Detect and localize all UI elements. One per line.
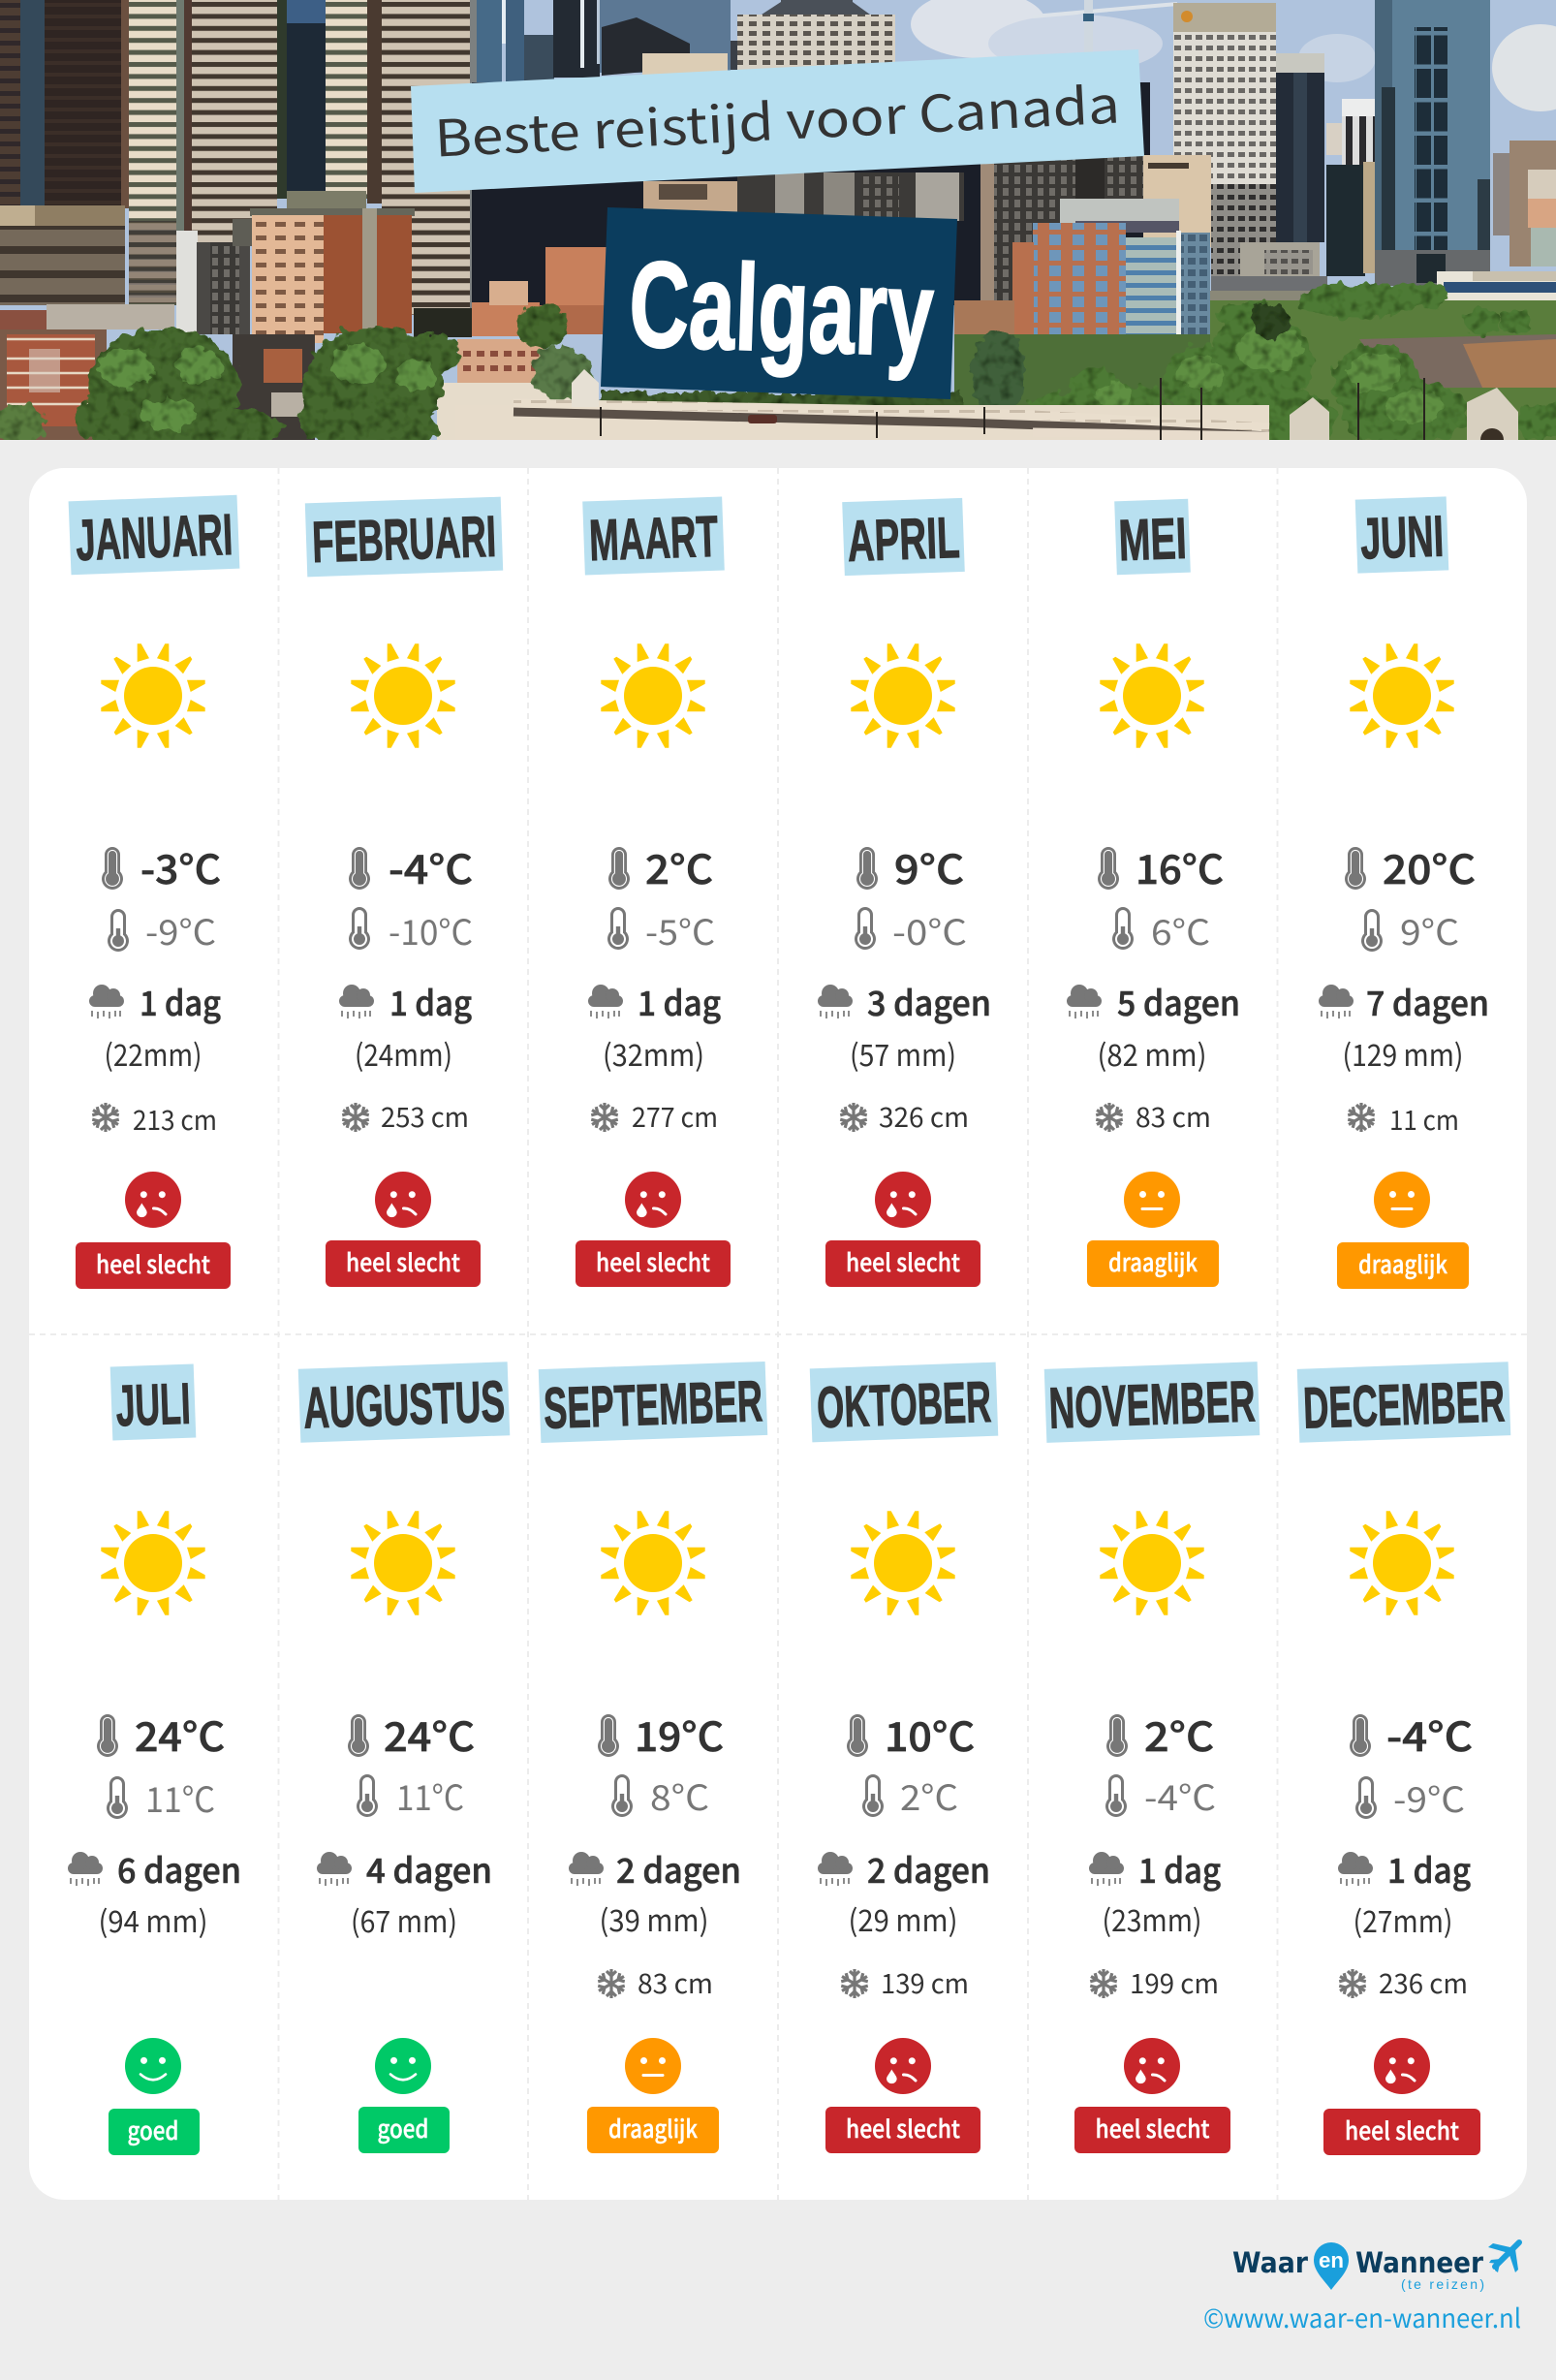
month heading: NOVEMBER [1047,1368,1257,1441]
rating badge: goed [378,2111,428,2145]
high temperature [598,1705,724,1763]
month heading: JUNI [1359,504,1445,571]
rating icon [625,1172,681,1228]
rating icon [875,2038,931,2094]
high temperature: 19°C [635,1705,724,1763]
month heading [69,495,239,575]
panel: november [1044,1362,1260,2153]
city box: Calgary: Calgary [627,235,936,382]
rain days: 4 dagen [366,1844,492,1894]
high temperature [1345,837,1476,895]
icon: sun [851,643,955,748]
snow [840,1963,969,2002]
low temperature [107,1772,215,1823]
high temperature: 2°C [645,837,713,895]
snow [590,1097,718,1136]
month heading: JANUARI [75,502,233,573]
snow: 326 cm [879,1097,969,1136]
rating badge: heel slecht [96,1246,210,1281]
icon: sun [351,643,455,748]
low temperature: -9°C [145,905,216,955]
high temperature: -3°C [140,837,221,895]
month heading [539,1362,767,1443]
rating icon [1374,2038,1430,2094]
rain days: 5 dagen [1117,977,1240,1026]
month heading: OKTOBER [816,1369,992,1440]
month heading: MEI [1117,506,1188,573]
low temperature: -10°C [389,905,473,955]
month heading: FEBRUARI [311,504,497,575]
rain days [588,977,721,1026]
high temperature: 24°C [135,1705,225,1763]
rainfall: (39 mm) [599,1896,709,1940]
snow [839,1097,969,1136]
rating badge [825,2107,980,2153]
month heading [110,1364,196,1440]
rainfall: (94 mm) [99,1897,207,1941]
rating badge: heel slecht [846,1244,960,1279]
icon: sun [1350,1511,1454,1615]
snow: 83 cm [1136,1097,1211,1136]
bridge [582,405,1269,440]
month heading: SEPTEMBER [543,1368,763,1441]
high temperature [102,837,221,895]
month heading [1114,499,1191,575]
rating badge [1323,2109,1480,2155]
snow [1095,1097,1211,1136]
snow [1338,1963,1468,2002]
logo: Waar en Wanneer: Wanneer [1355,2246,1484,2279]
snow: 199 cm [1130,1963,1219,2002]
high temperature [349,837,473,895]
rain days: 1 dag [1138,1844,1221,1894]
logo: Waar en Wanneer: (te reizen) [1401,2276,1484,2292]
rain days [1067,977,1240,1026]
panel: maart [576,497,731,1287]
month heading [1044,1362,1260,1443]
rating badge [587,2107,719,2153]
high temperature: 16°C [1136,837,1224,895]
high temperature: -4°C [1386,1705,1473,1763]
panel: december [1297,1362,1510,2155]
low temperature [1105,1770,1216,1821]
trees [0,282,1556,450]
title banner: Beste reistijd voor Canada [432,64,1121,172]
low temperature: 11°C [145,1772,215,1823]
rating icon [125,2038,181,2094]
high temperature [97,1705,225,1763]
rain days: 1 dag [1387,1844,1471,1894]
rain days [1338,1844,1471,1894]
icon: map pin: en [1319,2248,1344,2272]
rainfall: (29 mm) [849,1896,957,1940]
month heading: APRIL [846,505,961,574]
rainfall: (129 mm) [1343,1031,1463,1075]
rating badge [109,2109,200,2155]
low temperature: 11°C [396,1770,464,1821]
month heading [298,1362,510,1443]
rating badge [1074,2107,1230,2153]
rating badge: draaglijk [1358,1246,1448,1281]
icon: sun [101,1511,205,1615]
rating icon [1124,1172,1180,1228]
rating badge: goed [128,2113,178,2147]
high temperature: 2°C [1144,1705,1214,1763]
rain days [89,977,221,1026]
panel: oktober [810,1362,998,2153]
panel: februari [305,497,503,1287]
rating badge [1087,1240,1219,1287]
snow [1347,1100,1459,1139]
month heading [810,1362,998,1442]
rating icon [1124,2038,1180,2094]
snow: 236 cm [1379,1963,1468,2002]
title banner [411,49,1144,193]
icon: map pin [1314,2242,1349,2290]
icon: sun [601,643,705,748]
panel: januari [69,495,239,1289]
low temperature [607,905,715,955]
panel: months card [29,468,1527,2200]
rating badge [76,1242,231,1289]
city box: Calgary [601,207,957,399]
snow: 253 cm [381,1097,469,1136]
low temperature [855,905,967,955]
rating icon [625,2038,681,2094]
snow [1089,1963,1219,2002]
rain days: 1 dag [638,977,721,1026]
panel: augustus [298,1362,510,2153]
month heading [842,498,965,576]
low temperature: 8°C [650,1770,709,1821]
rain days: 1 dag [389,977,472,1026]
snow [597,1963,713,2002]
rating badge: draaglijk [608,2111,699,2145]
month heading [1355,496,1448,574]
month heading [305,497,503,577]
high temperature: 9°C [894,837,964,895]
low temperature [1361,905,1459,955]
rainfall: (24mm) [355,1031,452,1075]
high temperature [608,837,713,895]
rain days [339,977,472,1026]
rain days [818,1844,990,1894]
rainfall: (67 mm) [351,1897,457,1941]
low temperature: -0°C [892,905,967,955]
icon: sun [351,1511,455,1615]
rating badge: draaglijk [1108,1244,1198,1279]
rain days [1089,1844,1221,1894]
rain days: 3 dagen [867,977,991,1026]
high temperature [1106,1705,1214,1763]
high temperature [1098,837,1224,895]
rating icon [125,1172,181,1228]
rating badge: heel slecht [596,1244,710,1279]
low temperature [1112,905,1210,955]
low temperature [1355,1772,1465,1823]
rain days: 1 dag [140,977,221,1026]
low temperature: 2°C [900,1770,958,1821]
high temperature [348,1705,475,1763]
snow [91,1100,217,1139]
panel: september [539,1362,767,2153]
rating badge [576,1240,731,1287]
icon: sun [1100,643,1204,748]
snow: 213 cm [133,1100,217,1139]
rating badge: heel slecht [1095,2111,1210,2145]
logo: Waar en Wanneer [1232,2242,1519,2292]
rating icon [875,1172,931,1228]
rainfall: (23mm) [1103,1896,1201,1940]
snow: 83 cm [638,1963,713,2002]
low temperature: 9°C [1400,905,1459,955]
snow: 139 cm [881,1963,969,2002]
icon: sun [1100,1511,1204,1615]
rainfall: (32mm) [603,1031,704,1075]
panel: april [818,498,991,1287]
snow: 11 cm [1389,1100,1459,1139]
low temperature [349,905,473,955]
rating icon [1374,1172,1430,1228]
website url: ©www.waar-en-wanneer.nl [1203,2298,1521,2335]
high temperature [847,1705,975,1763]
low temperature: -5°C [645,905,715,955]
high temperature: 20°C [1383,837,1476,895]
rainfall: (57 mm) [850,1031,956,1075]
photo: Calgary skyline [0,0,1556,450]
icon: airplane [1488,2242,1519,2272]
low temperature: 6°C [1151,905,1210,955]
low temperature [108,905,216,955]
rain days: 2 dagen [867,1844,990,1894]
panel: mei [1067,499,1240,1287]
rain days: 2 dagen [616,1844,741,1894]
high temperature: -4°C [389,837,473,895]
rainfall: (27mm) [1353,1897,1453,1941]
low temperature [611,1770,709,1821]
icon: sun [601,1511,705,1615]
low temperature: -4°C [1144,1770,1216,1821]
high temperature: 24°C [384,1705,475,1763]
rating badge [825,1240,980,1287]
rating badge: heel slecht [1345,2113,1459,2147]
high temperature [856,837,964,895]
low temperature [862,1770,958,1821]
rating badge [358,2107,450,2153]
month heading: MAART [588,504,719,573]
rainfall: (82 mm) [1097,1031,1207,1075]
rainfall: (22mm) [105,1031,202,1075]
panel: juni [1319,496,1489,1289]
rating badge: heel slecht [346,1244,460,1279]
low temperature [357,1770,464,1821]
panel: juli [68,1364,241,2155]
rain days: 6 dagen [117,1844,241,1894]
rain days: 7 dagen [1366,977,1489,1026]
month heading: AUGUSTUS [302,1368,506,1441]
icon: sun [1350,643,1454,748]
month heading: JULI [114,1371,192,1438]
rating icon [375,2038,431,2094]
rating icon [375,1172,431,1228]
high temperature [1350,1705,1473,1763]
icon: sun [101,643,205,748]
snow: 277 cm [632,1097,718,1136]
icon: sun [851,1511,955,1615]
high temperature: 10°C [885,1705,975,1763]
logo: Waar en Wanneer: Waar [1232,2246,1309,2279]
snow [341,1097,469,1136]
month heading [582,497,725,575]
rating badge: heel slecht [846,2111,960,2145]
rating badge [1337,1242,1469,1289]
low temperature: -9°C [1393,1772,1465,1823]
rating badge [326,1240,481,1287]
